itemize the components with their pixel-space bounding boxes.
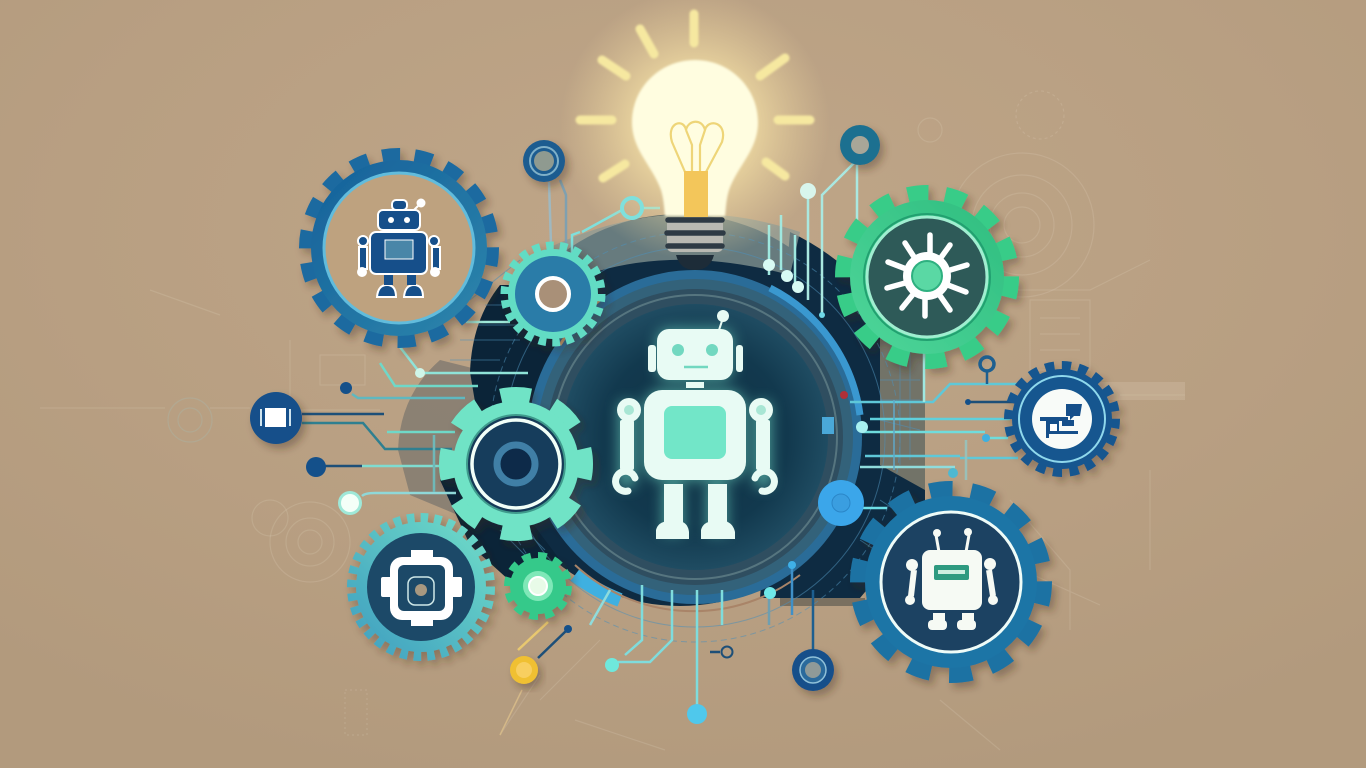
icon: sun cog [887,235,967,316]
small nodes [306,183,994,724]
robot main glowing [616,310,774,539]
node: top right ring [840,125,880,165]
robot glow [619,329,771,534]
node: blue hub dot [818,480,864,526]
icon: desk glyph [1040,404,1082,438]
circuit lines left [302,180,660,496]
central circular hub [528,270,862,611]
gear: teal fine teeth with chip [352,518,490,656]
circuit lines bottom [500,585,722,735]
icon: square robot [905,528,998,630]
gear: teal small top [505,246,601,342]
icon: small robot [358,200,440,297]
gear: blue robot top left [306,155,492,341]
light rays [580,14,810,178]
connector ring [622,198,642,218]
node: top left ring [523,140,565,182]
icon: lightbulb [560,0,830,270]
node: left square [250,392,302,444]
gear: green sun top right [844,194,1010,360]
gear: small green [508,556,568,616]
faint background sketches [40,91,1185,750]
node: bottom navy ring [792,649,834,691]
icon: chip [381,550,462,626]
node: yellow [510,656,538,684]
circuit lines right [769,162,1020,652]
gear: blue robot bottom right [859,490,1043,674]
gear: navy right desk icon [1009,366,1115,472]
dark circuit disc behind robot [398,214,925,642]
gear: mint left [448,396,584,532]
